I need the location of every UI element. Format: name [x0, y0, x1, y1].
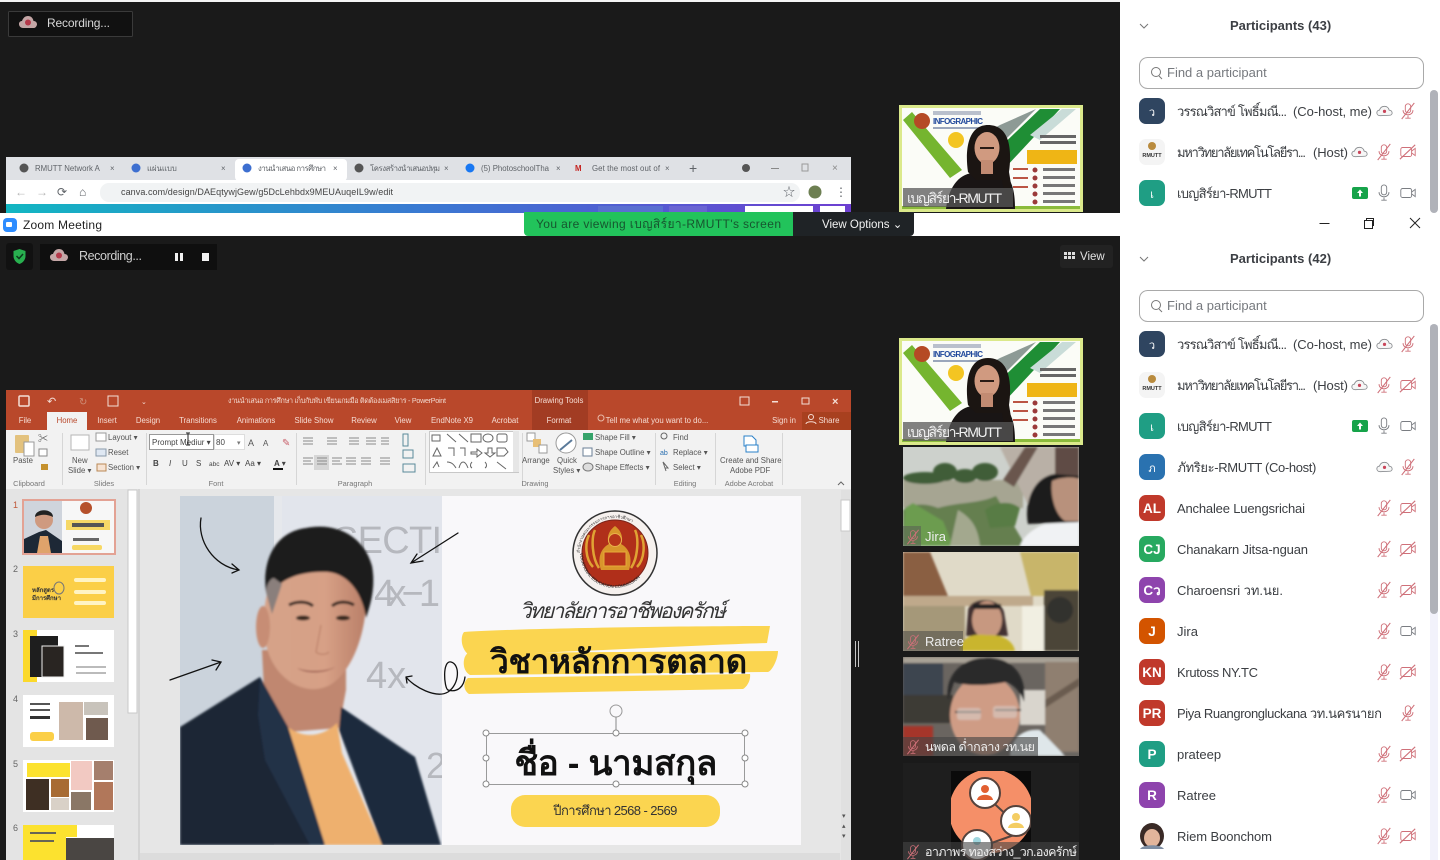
clipboard group [13, 434, 48, 488]
college name: วิทยาลัยการอาชีพองครักษ์ [520, 599, 730, 623]
window min max close [1320, 218, 1420, 228]
font group: A ▾ [274, 459, 286, 468]
adobe acrobat group [720, 436, 844, 488]
college seal: สำนักงานคณะกรรมการการอาชีวศึกษา [576, 514, 633, 553]
drawing group: Styles ▾ [553, 466, 580, 475]
thumbnail 5: 5 [13, 759, 18, 769]
yellow brush strokes [462, 626, 778, 694]
row: co-host 2 [1139, 454, 1414, 480]
title and tab bar: View [395, 416, 412, 425]
row: host: RMUTT [1142, 153, 1162, 159]
row: presenter: เบญสิร์ยา-RMUTT [1177, 419, 1272, 434]
title and tab bar: Drawing Tools [535, 396, 584, 405]
recording controls [40, 244, 217, 270]
row: host: (Host) [1313, 378, 1348, 393]
paragraph label: Paragraph [338, 479, 372, 488]
muted badge and name [903, 526, 947, 546]
video tile: Jira [903, 447, 1079, 546]
academic year pill: ปีการศึกษา 2568 - 2569 [552, 803, 677, 818]
row: Charoensri: Charoensri วท.นย. [1177, 583, 1283, 598]
row: Ratree [1139, 782, 1415, 808]
quick access icons: ⌄ [141, 399, 147, 406]
editing group: ab [660, 450, 668, 457]
font group: Font [209, 479, 223, 488]
row: co-host me: วรรณวิสาข์ โพธิ์มณี... [1177, 335, 1287, 352]
font group: Prompt Mediur ▾ [152, 438, 211, 447]
editing group [660, 433, 708, 488]
drawing group [430, 431, 651, 488]
browser window controls [742, 163, 838, 174]
muted badge and name [903, 631, 964, 651]
slide title: วิชาหลักการตลาด [490, 643, 747, 680]
thumbnail 6 [13, 823, 114, 860]
top recording badge [8, 12, 132, 36]
editing area: ▾ [842, 833, 846, 840]
search box: Find a participant [1167, 65, 1267, 80]
browser toolbar and address: ☆ [783, 185, 795, 199]
row: Krutoss: KN [1142, 665, 1162, 680]
paragraph group [303, 434, 415, 472]
panel heading [1140, 251, 1331, 266]
adobe acrobat group: Adobe Acrobat [725, 479, 773, 488]
row: co-host me [1139, 331, 1414, 357]
browser tabs: × [333, 164, 338, 173]
face [264, 567, 366, 689]
title and tab bar: Review [351, 416, 377, 425]
video tile: third participant [903, 657, 1079, 756]
browser tabs: M [575, 164, 582, 173]
browser toolbar and address: ⋮ [835, 185, 847, 199]
participants panel bottom [1120, 236, 1440, 860]
row: host: มหาวิทยาลัยเทคโนโลยีรา... [1177, 145, 1306, 160]
editing group: Replace ▾ [673, 448, 708, 457]
quick access icons [19, 396, 838, 408]
drawing group: Shape Fill ▾ [595, 433, 636, 442]
row: Charoensri: Cว [1143, 583, 1161, 598]
title and tab bar: EndNote X9 [431, 416, 473, 425]
browser toolbar and address: → [36, 185, 48, 199]
row: Anchalee [1139, 495, 1415, 521]
row: prateep: P [1147, 747, 1157, 762]
selected text box [483, 730, 748, 787]
photo of man at whiteboard: SECTI [333, 520, 442, 562]
row: co-host me: ว [1149, 107, 1155, 119]
search box: Find a participant [1167, 298, 1267, 313]
academic year pill [511, 795, 720, 827]
panel heading: Participants (42) [1230, 251, 1331, 266]
row: Piya: Piya Ruangrongluckana วท.นครนายก [1177, 706, 1382, 721]
college seal [572, 510, 658, 596]
browser tabs: × [221, 164, 226, 173]
quick access icons: ↻ [79, 397, 87, 408]
drawing group: Shape Effects ▾ [595, 463, 650, 472]
ribbon [6, 430, 851, 489]
shared browser window [6, 157, 851, 213]
title and tab bar: งานนำเสนอ การศึกษา เก็บกับพับ เขียนเกมมือ ติดต้องเมสสิยาร - PowerPoint [228, 395, 446, 405]
thumbnail 6: 6 [13, 823, 18, 833]
photo of man at whiteboard: 4x − 1 [374, 573, 440, 615]
photo of man at whiteboard [180, 496, 446, 845]
drawing group: Arrange [522, 456, 550, 465]
video tile: Ratree [903, 552, 1079, 651]
shirt [288, 723, 382, 845]
zoom title: Zoom Meeting [23, 218, 102, 232]
browser toolbar and address: canva.com/design/DAEqtywjGew/g5DcLehbdx9MEUAuqeIL9w/edit [121, 187, 393, 197]
row: Riem [1140, 823, 1415, 849]
row: host [1139, 139, 1415, 165]
browser tabs: × [556, 164, 561, 173]
view button [1060, 245, 1113, 268]
row: Charoensri [1139, 577, 1415, 603]
row: prateep [1139, 741, 1415, 767]
powerpoint window [6, 390, 851, 860]
brows and eyes [289, 602, 354, 606]
title and tab bar: Insert [97, 416, 118, 425]
row: co-host 2: ภ [1148, 463, 1156, 475]
row: prateep: prateep [1177, 747, 1221, 762]
browser tabs: งานนำเสนอ การศึกษา [258, 164, 326, 173]
browser tabs: แผ่นแบบ [147, 164, 177, 173]
resize handle [856, 641, 858, 667]
row: presenter [1139, 180, 1415, 206]
row: presenter: เ [1150, 189, 1154, 201]
hair [265, 527, 373, 618]
title and tab bar: Sign in [772, 416, 796, 425]
title and tab bar: Slide Show [294, 416, 334, 425]
font group: B [153, 459, 159, 468]
video tile: avatar network [903, 763, 1079, 860]
browser toolbar and address: ← [15, 185, 27, 199]
thumbnail 1 [13, 499, 116, 555]
slides group: Layout ▾ [108, 433, 138, 442]
muted badge and name: Ratree [925, 634, 964, 649]
row: host [1139, 372, 1415, 398]
row: Ratree: R [1147, 788, 1157, 803]
editing area: ▾ [842, 813, 846, 820]
browser tabs: × [444, 164, 449, 173]
drawing group: Drawing [521, 479, 549, 488]
editing group: Find [673, 433, 688, 442]
row: host: (Host) [1313, 145, 1348, 160]
top edge strip [0, 0, 1120, 2]
scrollbar [1430, 90, 1438, 213]
row: Krutoss: Krutoss NY.TC [1177, 665, 1258, 680]
row: Chanakarn: Chanakarn Jitsa-nguan [1177, 542, 1308, 557]
top recording badge: Recording... [47, 16, 110, 30]
title and tab bar: Tell me what you want to do... [606, 416, 708, 425]
adobe acrobat group: Adobe PDF [730, 466, 771, 475]
adobe acrobat group: Create and Share [720, 456, 782, 465]
title and tab bar: File [19, 416, 31, 425]
thumbnail 2: มีการศึกษา [32, 594, 61, 602]
font group: 80 [216, 438, 225, 447]
row: co-host me: (Co-host, me) [1293, 337, 1372, 352]
editing group: Select ▾ [673, 463, 701, 472]
browser tabs: RMUTT Network A [35, 164, 101, 173]
browser tabs: + [689, 160, 697, 176]
browser tabs: โครงสร้างนำเสนอปทุม [370, 164, 440, 173]
jacket [180, 677, 325, 845]
slides group [68, 433, 140, 488]
row: presenter [1139, 413, 1415, 439]
recording controls: Recording... [79, 249, 142, 263]
font group: S [196, 459, 201, 468]
browser toolbar and address: ⟳ [57, 185, 67, 199]
view options button: View Options ⌄ [822, 219, 902, 231]
font group: I [169, 459, 172, 468]
presenter thumbnail main: INFOGRAPHIC [933, 350, 983, 359]
presenter thumbnail top: INFOGRAPHIC [933, 117, 983, 126]
clipboard group: Clipboard [13, 479, 45, 488]
slide [169, 496, 801, 845]
thumbnail 4: 4 [13, 694, 18, 704]
thumbnail 3 [13, 629, 114, 682]
slide thumbnail pane [6, 489, 140, 860]
view button: View [1080, 251, 1105, 263]
selected text box: ชื่อ - นามสกุล [514, 738, 717, 785]
editing area: ▴ [842, 823, 846, 830]
panel heading: Participants (43) [1230, 18, 1331, 33]
scrollbar [1430, 324, 1438, 860]
title and tab bar: Format [547, 416, 572, 425]
thumbnail 2: หลักสูตร [32, 586, 55, 595]
row: Piya [1139, 700, 1414, 726]
row: Krutoss [1139, 659, 1415, 685]
photo of man at whiteboard: 2 [426, 745, 446, 786]
row: host: RMUTT [1142, 386, 1162, 392]
row: Anchalee: AL [1143, 501, 1161, 516]
neck [262, 650, 346, 732]
row: co-host me: (Co-host, me) [1293, 104, 1372, 119]
thumbnail 5 [13, 759, 114, 812]
muted badge and name [903, 737, 1038, 756]
slides group: New [72, 456, 88, 465]
presenter thumbnail main [899, 338, 1083, 445]
quick access icons: ↶ [47, 396, 56, 408]
font group: A [248, 438, 254, 448]
title and tab bar: Transitions [179, 416, 217, 425]
editing group: Editing [674, 479, 696, 488]
row: Anchalee: Anchalee Luengsrichai [1177, 501, 1305, 516]
row: presenter: เ [1150, 422, 1154, 434]
browser tabs: × [665, 164, 670, 173]
browser tabs: (5) PhotoschoolTha [481, 164, 550, 173]
row: co-host 2: ภัทริยะ-RMUTT (Co-host) [1177, 460, 1316, 475]
search box [1140, 290, 1424, 322]
browser tabs [20, 160, 697, 176]
search box [1140, 58, 1424, 88]
slides group: Slides [94, 479, 114, 488]
view options button [793, 212, 914, 236]
presenter name label: เบญสิร์ยา-RMUTT [907, 424, 1002, 440]
font group: Aa ▾ [245, 459, 261, 468]
slides group: Slide ▾ [68, 466, 92, 475]
row: Chanakarn: CJ [1143, 542, 1161, 557]
quick access icons: × [832, 396, 838, 408]
viewing banner: You are viewing เบญสิร์ยา-RMUTT's screen [536, 217, 781, 231]
editing area [140, 489, 851, 860]
icon: zoom logo [3, 218, 17, 232]
presenter name label: เบญสิร์ยา-RMUTT [907, 190, 1002, 206]
slides group: Reset [108, 448, 129, 457]
thumbnail 3: 3 [13, 629, 18, 639]
presenter thumbnail top [899, 105, 1083, 212]
zoom title bar [0, 213, 1440, 236]
title and tab bar [6, 390, 851, 430]
row: Riem: Riem Boonchom [1177, 829, 1272, 844]
row: co-host me: วรรณวิสาข์ โพธิ์มณี... [1177, 102, 1287, 119]
title and tab bar: Acrobat [492, 416, 519, 425]
font group: A [263, 439, 269, 448]
rotate handle [610, 705, 622, 733]
font group: AV ▾ [224, 459, 240, 468]
hand-drawn arrows [170, 518, 465, 694]
browser toolbar and address: ⌂ [79, 185, 86, 199]
slides group: Section ▾ [108, 463, 140, 472]
row: Piya: PR [1143, 706, 1162, 721]
drawing group: Quick [557, 456, 577, 465]
drawing group: Shape Outline ▾ [595, 448, 651, 457]
font group: ✎ [282, 438, 290, 449]
presenter figure [946, 358, 1015, 442]
panel heading [1140, 18, 1331, 33]
icon: security shield [6, 243, 33, 270]
muted badge and name: อาภาพร ทองสว่าง_วก.องครักษ์ [925, 845, 1077, 859]
row: co-host me [1139, 98, 1414, 124]
college seal: VOCATIONAL EDUCATION COMMISSION [580, 552, 640, 588]
clipboard group: ✂ [38, 434, 48, 445]
font group: ▾ [237, 440, 241, 447]
thumbnail 2 [13, 564, 114, 618]
title and tab bar: Share [819, 416, 839, 425]
row: Jira [1139, 618, 1415, 644]
row: host: มหาวิทยาลัยเทคโนโลยีรา... [1177, 378, 1306, 393]
participants panel top [1120, 0, 1440, 213]
title and tab bar: Home [57, 416, 77, 425]
title and tab bar: Animations [237, 416, 275, 425]
browser tabs: Get the most out of [592, 164, 661, 173]
muted badge and name: นพดล ด่ำกลาง วท.นย [925, 738, 1035, 754]
muted badge and name [903, 842, 1079, 860]
title and tab bar: Design [136, 416, 160, 425]
row: co-host me: ว [1149, 340, 1155, 352]
presenter figure [946, 125, 1015, 209]
row: presenter: เบญสิร์ยา-RMUTT [1177, 186, 1272, 201]
row: Ratree: Ratree [1177, 788, 1216, 803]
photo of man at whiteboard: 4x [366, 655, 406, 697]
thumbnail 2: 2 [13, 564, 18, 574]
thumbnail 1: 1 [13, 500, 18, 510]
font group: U [182, 459, 188, 468]
clipboard group: Paste [13, 456, 33, 465]
row: Chanakarn [1139, 536, 1415, 562]
font group [150, 433, 290, 488]
viewing banner [524, 212, 793, 236]
browser toolbar and address [15, 185, 847, 199]
row: Jira: Jira [1177, 624, 1199, 639]
font group: abc [209, 461, 220, 468]
row: Jira: J [1148, 624, 1156, 639]
browser window controls: × [832, 163, 838, 174]
browser tabs: × [110, 164, 115, 173]
thumbnail 4 [13, 694, 114, 747]
muted badge and name: Jira [925, 529, 947, 544]
